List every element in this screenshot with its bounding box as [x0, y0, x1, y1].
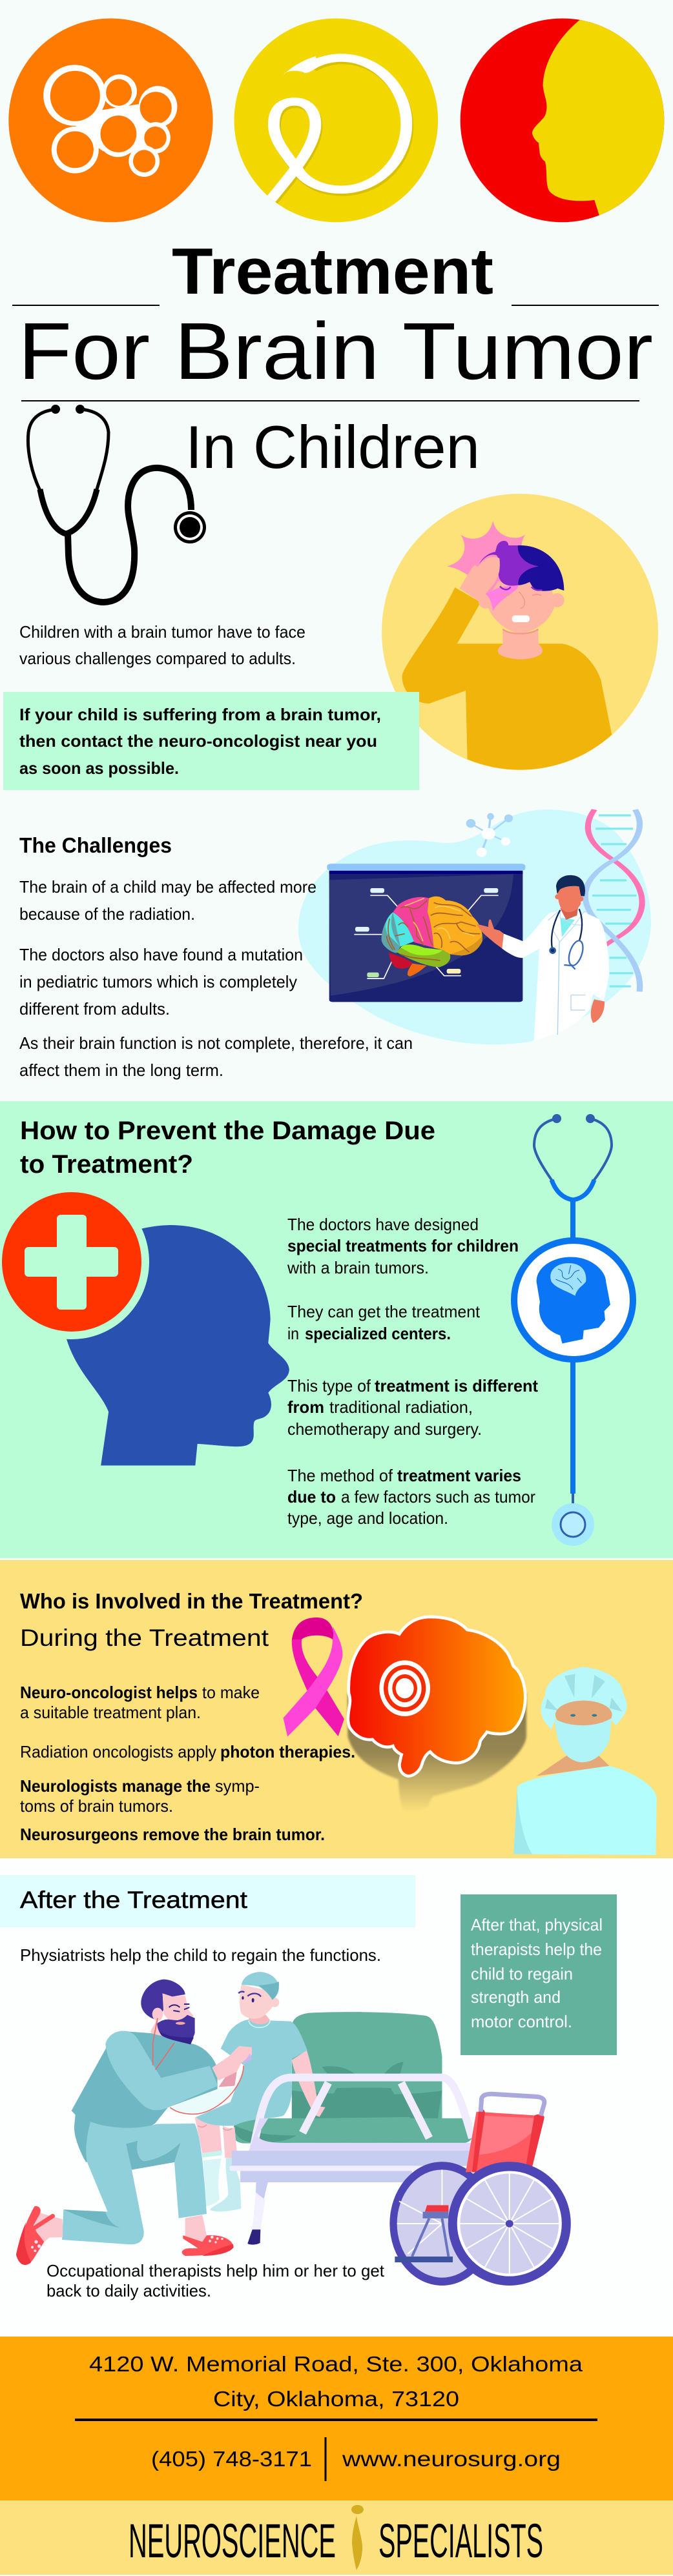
panel: contact footer [0, 2337, 673, 2500]
head and hair [447, 521, 564, 660]
title: For Brain Tumor: For Brain Tumor [18, 307, 653, 396]
yellow circle backdrop [382, 494, 658, 770]
text: prevention paragraphs: They can get the treatment [287, 1302, 481, 1321]
callout: contact the neuro-oncologist: If your child is suffering from a brain tumor, [19, 705, 381, 724]
callout: physical therapists [461, 1894, 617, 2055]
panel: hero header [3, 12, 673, 790]
text: specialists during treatment: Neuro-oncologist helps [20, 1683, 198, 1702]
logo: NEUROSCIENCE wordmark: NEUROSCIENCE [129, 2514, 336, 2568]
shadow under brain [347, 1693, 526, 1812]
callout: physical therapists: therapists help the [471, 1940, 602, 1959]
panel: who is involved [0, 1560, 673, 1858]
text: occupational therapists [47, 2261, 385, 2300]
text: address: City, Oklahoma, 73120 [213, 2387, 459, 2411]
text: prevention paragraphs: This type of [287, 1376, 371, 1395]
text: challenge paragraphs [19, 877, 413, 1080]
icon: yellow circle with white ribbon [234, 18, 438, 222]
panel: how to prevent the damage [0, 1101, 673, 1558]
brain diagram [354, 888, 499, 979]
text: occupational therapists: back to daily activities. [47, 2281, 211, 2300]
wheelchair [389, 2094, 571, 2286]
text: specialists during treatment: Radiation oncologists apply [20, 1742, 216, 1761]
text: address [89, 2352, 583, 2411]
text: specialists during treatment: a suitable treatment plan. [20, 1703, 201, 1722]
icon: red medical cross [2, 1192, 141, 1332]
icon: head with brain [537, 1257, 610, 1344]
divider: left of title [12, 305, 160, 306]
text: prevention paragraphs: type, age and location. [287, 1508, 448, 1528]
text: specialists during treatment: photon therapies. [220, 1742, 355, 1761]
text: prevention paragraphs: The method of [287, 1466, 393, 1485]
text: challenge paragraphs: As their brain function is not complete, therefore, it can [19, 1033, 413, 1053]
callout: contact the neuro-oncologist: as soon as possible. [19, 758, 179, 778]
text: prevention paragraphs: specialized centers. [305, 1324, 451, 1343]
text: intro: Children with a brain tumor have to face [19, 622, 305, 642]
text: address: 4120 W. Memorial Road, Ste. 300, Oklahoma [89, 2352, 583, 2376]
text: specialists during treatment: symp- [215, 1776, 260, 1796]
illustration: therapist, child, couch and wheelchair [16, 1972, 571, 2286]
text: prevention paragraphs: a few factors such as tumor [341, 1487, 535, 1506]
icon: pink awareness ribbon [284, 1618, 344, 1737]
heading: who is involved: Who is Involved in the Treatment? [20, 1589, 363, 1613]
callout: contact the neuro-oncologist [3, 692, 419, 790]
heading: how to prevent [20, 1117, 435, 1179]
divider: phone and website [324, 2437, 327, 2481]
text: prevention paragraphs: treatment is different [375, 1376, 538, 1395]
illustration: doctor presenting brain chart [298, 809, 651, 1044]
heading: The Challenges: The Challenges [19, 833, 172, 857]
text: specialists during treatment: toms of brain tumors. [20, 1796, 173, 1816]
callout: physical therapists: After that, physical [471, 1915, 603, 1934]
backdrop blob [298, 809, 651, 1044]
sweater [402, 587, 623, 776]
heading: how to prevent: How to Prevent the Damage Due [20, 1117, 435, 1145]
text: prevention paragraphs: in [287, 1324, 299, 1343]
text: specialists during treatment: Neurosurgeons remove the brain tumor. [20, 1825, 325, 1844]
text: intro: various challenges compared to adults. [19, 649, 296, 668]
text: specialists during treatment [20, 1683, 355, 1844]
illustration: DNA helix [585, 809, 642, 991]
icon: brain with target [348, 1617, 525, 1776]
illustration: boy with headache [382, 494, 658, 776]
text: intro [19, 622, 305, 668]
text: phone: (405) 748-3171 [151, 2447, 312, 2471]
callout: physical therapists: strength and [471, 1987, 561, 2007]
text: physiatrists: Physiatrists help the child to regain the functions. [20, 1945, 381, 1965]
illustration: surgeon [513, 1667, 657, 1855]
text: challenge paragraphs: in pediatric tumors which is completely [19, 972, 297, 991]
text: challenge paragraphs: The doctors also have found a mutation [19, 945, 303, 964]
subheading: during the treatment: During the Treatment [20, 1625, 269, 1651]
heading: after the treatment [0, 1875, 415, 1927]
icon: black stethoscope [28, 405, 206, 602]
illustration: blue head with medical cross [0, 1184, 289, 1466]
text: prevention paragraphs: chemotherapy and surgery. [287, 1419, 482, 1439]
logo: gold i figure [351, 2505, 364, 2570]
title: In Children: In Children [185, 413, 480, 481]
couch [234, 2012, 472, 2144]
text: prevention paragraphs: special treatments for children [287, 1236, 519, 1255]
illustration: doctor [477, 875, 609, 1041]
illustration: blue stethoscope with head [514, 1114, 633, 1546]
icon: red circle with face profile [461, 12, 673, 225]
icon: orange circle with tumor cells [8, 18, 213, 222]
text: challenge paragraphs: different from adults. [19, 999, 170, 1019]
text: prevention paragraphs [287, 1215, 538, 1528]
text: prevention paragraphs: from [287, 1397, 324, 1417]
panel: the challenges [19, 809, 651, 1080]
heading: after the treatment: After the Treatment [20, 1887, 248, 1913]
text: prevention paragraphs: treatment varies [397, 1466, 521, 1485]
hospital bed [230, 2078, 472, 2182]
callout: physical therapists: child to regain [471, 1964, 573, 1983]
panel: after the treatment [0, 1858, 673, 2337]
child patient [170, 1972, 336, 2211]
icon row: three circles [8, 12, 673, 225]
text: occupational therapists: Occupational therapists help him or her to get [47, 2261, 385, 2280]
text: specialists during treatment: Neurologists manage the [20, 1776, 211, 1796]
text: challenge paragraphs: affect them in the long term. [19, 1060, 223, 1080]
text: prevention paragraphs: due to [287, 1487, 336, 1506]
text: challenge paragraphs: The brain of a child may be affected more [19, 877, 316, 897]
text: prevention paragraphs: The doctors have designed [287, 1215, 479, 1234]
panel: logo band [0, 2500, 673, 2575]
text: prevention paragraphs: traditional radiation, [329, 1397, 473, 1417]
chart board [327, 864, 525, 1002]
text: prevention paragraphs: with a brain tumors. [287, 1258, 429, 1277]
text: challenge paragraphs: because of the radiation. [19, 904, 195, 924]
text: website: www.neurosurg.org [342, 2447, 561, 2471]
divider: right of title [512, 305, 659, 306]
text: specialists during treatment: to make [202, 1683, 260, 1702]
divider: under title [21, 400, 639, 401]
callout: physical therapists: motor control. [471, 2012, 572, 2031]
icon: molecule [466, 813, 513, 857]
divider: footer [75, 2419, 597, 2421]
therapist [16, 1980, 268, 2265]
heading: how to prevent: to Treatment? [20, 1150, 193, 1179]
callout: contact the neuro-oncologist: then contact the neuro-oncologist near you [19, 731, 377, 751]
title: Treatment: Treatment [172, 236, 493, 308]
